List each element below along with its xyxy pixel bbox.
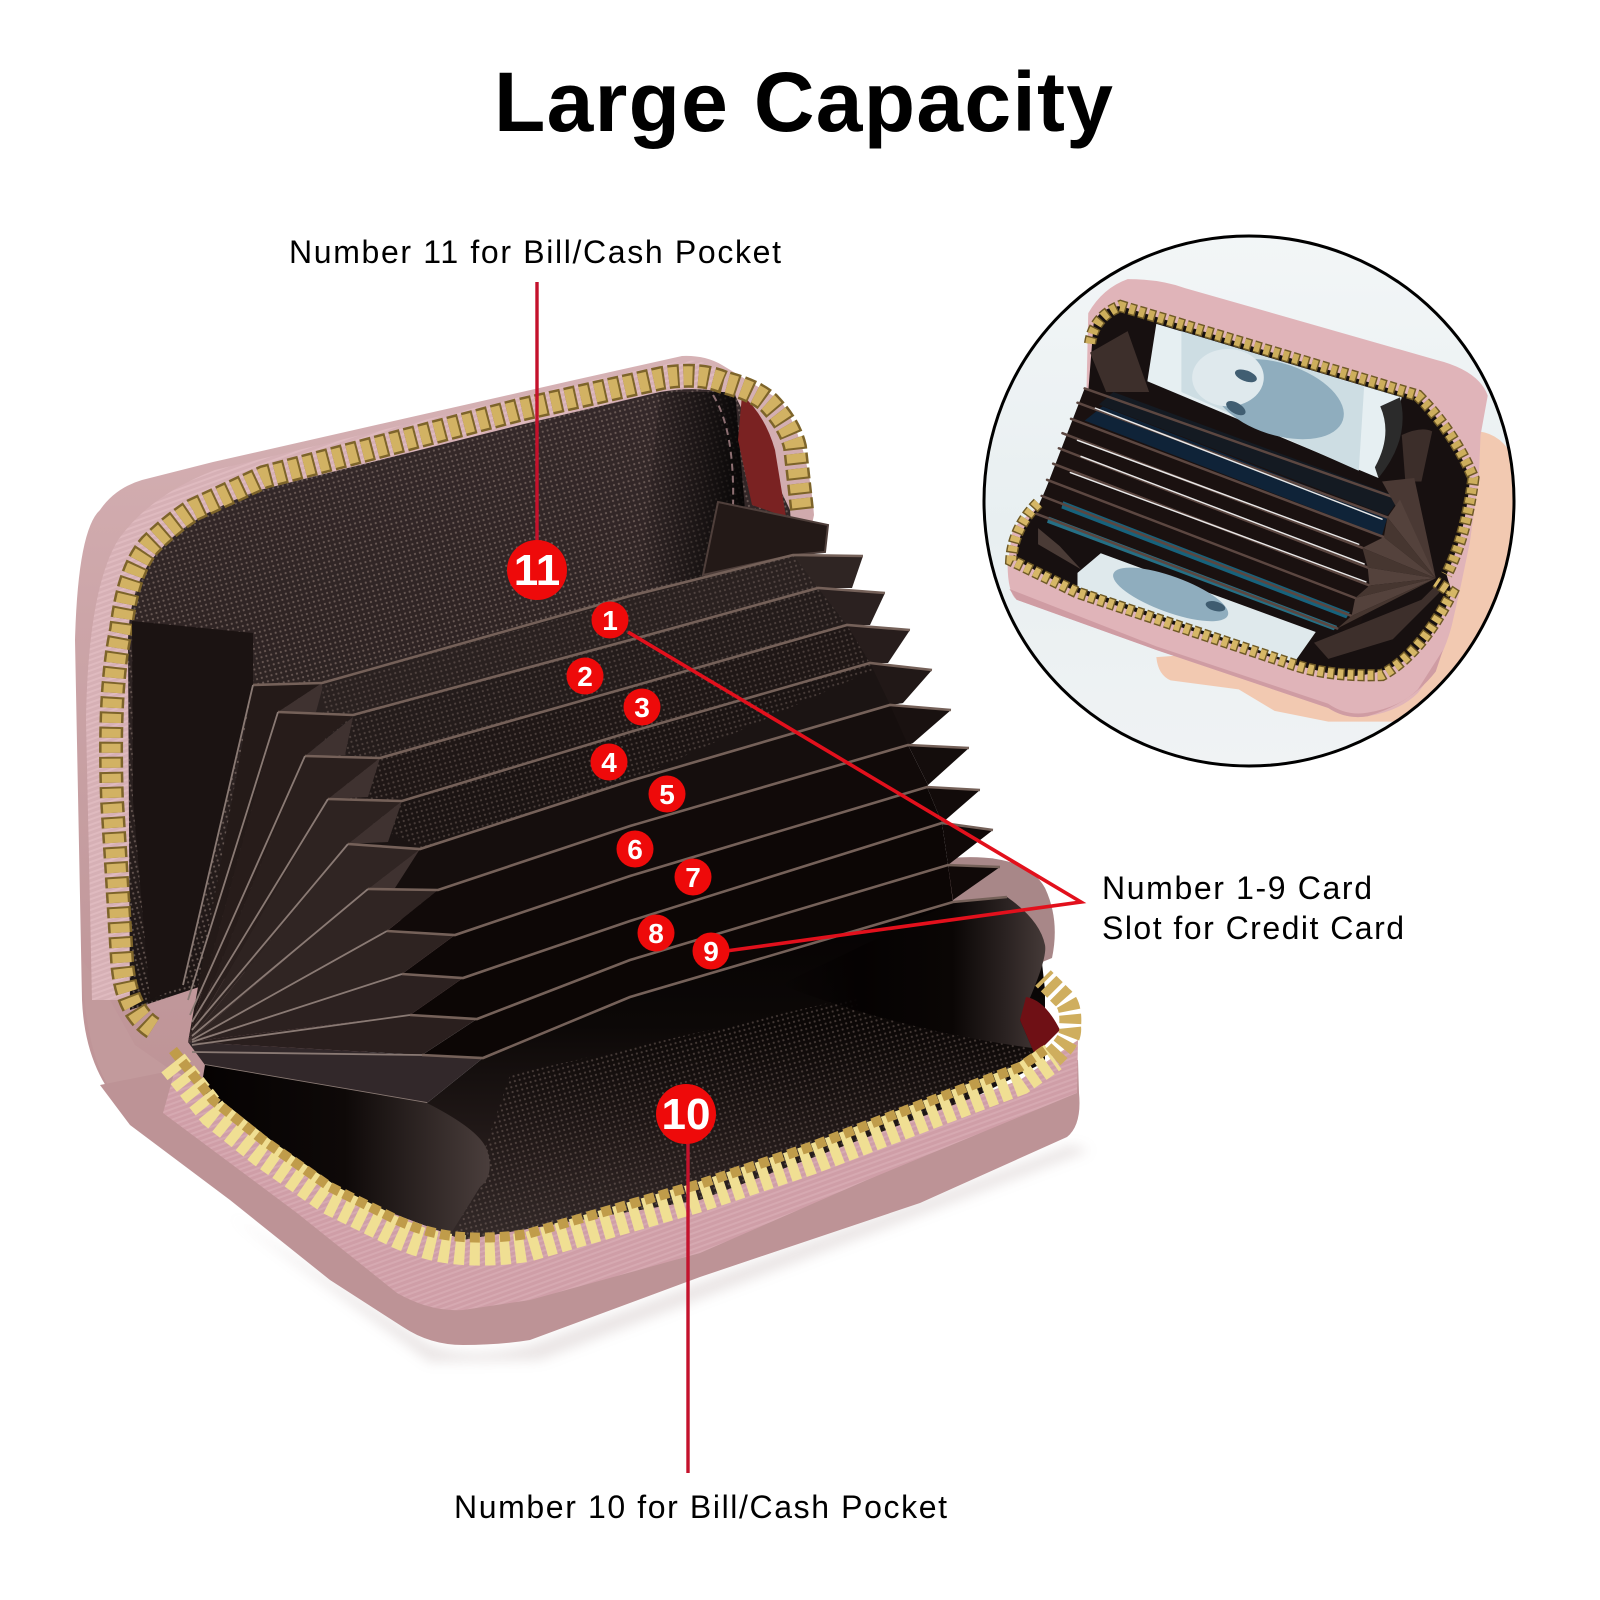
right red lining: [1020, 997, 1060, 1055]
badge 9: [692, 932, 730, 970]
card slots 1-9 interior: [278, 555, 953, 1058]
label: number 10: Number 10 for Bill/Cash Pocket: [454, 1489, 947, 1525]
inset card slots: [1036, 388, 1400, 636]
inset zippers: [1011, 306, 1473, 675]
right back pleat: [703, 502, 828, 575]
inset background: [980, 230, 1520, 770]
wallet back leather: [75, 356, 814, 1110]
badge 4: [590, 744, 628, 780]
badge 3: [624, 688, 660, 726]
badge 5: [648, 776, 686, 812]
badge 11: [507, 540, 567, 600]
bracket lines to slots 1 and 9: [628, 632, 1081, 951]
badge 5: 5: [659, 779, 675, 810]
badge 8: [638, 914, 674, 952]
label: number 1-9 card slots: Number 1-9 Card: [1102, 870, 1372, 906]
badge 2: 2: [577, 661, 593, 692]
left inner flap: [132, 621, 253, 1000]
badge 3: 3: [634, 692, 650, 723]
inset wallet body: [1008, 279, 1488, 717]
badge 6: 6: [627, 834, 643, 865]
bottom pocket interior (number 10): [427, 902, 1045, 1255]
inset left flaps: [1090, 331, 1149, 392]
hand: [1156, 431, 1518, 740]
right pocket flap: [780, 897, 1045, 1048]
badge 4: 4: [601, 747, 617, 778]
title: Large Capacity: [494, 55, 1113, 149]
bottom zipper teeth: [173, 978, 1070, 1251]
badge 7: [674, 858, 712, 896]
badge 11: 11: [514, 546, 560, 595]
badge 1: 1: [602, 605, 618, 636]
bottom zipper tape: [163, 1040, 1078, 1310]
label: number 11: Number 11 for Bill/Cash Pocket: [289, 234, 781, 270]
number badges: [507, 540, 730, 1144]
inset right pocket: [1402, 429, 1432, 482]
wallet soft shadow: [230, 1145, 1090, 1362]
badge 9: 9: [703, 936, 719, 967]
badge 6: [616, 830, 654, 868]
inset bottom rim: [1009, 589, 1443, 717]
bottom left pocket flap: [200, 1065, 490, 1235]
inset interior: [1016, 306, 1470, 677]
inset bottom bill: [1077, 553, 1316, 663]
inset card fan pleats: [1314, 478, 1439, 659]
badge 8: 8: [648, 918, 664, 949]
side strap leather bulge: [945, 857, 1055, 965]
bottom leather rim: [100, 1060, 1080, 1345]
right slot tips: [793, 555, 1000, 900]
slot edges and pleat seams: [183, 555, 1007, 1103]
back pocket interior (number 11): [128, 389, 800, 1010]
main wallet illustration: [75, 282, 1090, 1473]
stitching: [713, 395, 733, 507]
inset photo circle: [980, 230, 1520, 770]
badge 2: [566, 658, 604, 694]
badge 10: [656, 1084, 716, 1144]
slot fabric texture: [322, 555, 888, 849]
left fan pleats: [188, 683, 483, 1103]
badge 10: 10: [662, 1090, 710, 1139]
top zipper tape: [86, 360, 725, 1000]
inset top bill: [1147, 324, 1403, 478]
line to pocket 10: [686, 1130, 690, 1473]
badge 7: 7: [685, 862, 701, 893]
label: number 1-9 card slots: Slot for Credit Card: [1102, 910, 1404, 946]
line to pocket 11: [535, 282, 539, 545]
badge 1: [592, 602, 628, 638]
label: number 1-9 card slots: [1102, 870, 1404, 946]
red lining: [738, 395, 786, 517]
inset circle border: [984, 236, 1514, 766]
top zipper teeth: [111, 376, 802, 1028]
left quilted leather hinge: [82, 960, 180, 1150]
pointer lines: [537, 282, 1081, 1473]
fold fabric between pleats and slots: [278, 683, 420, 889]
